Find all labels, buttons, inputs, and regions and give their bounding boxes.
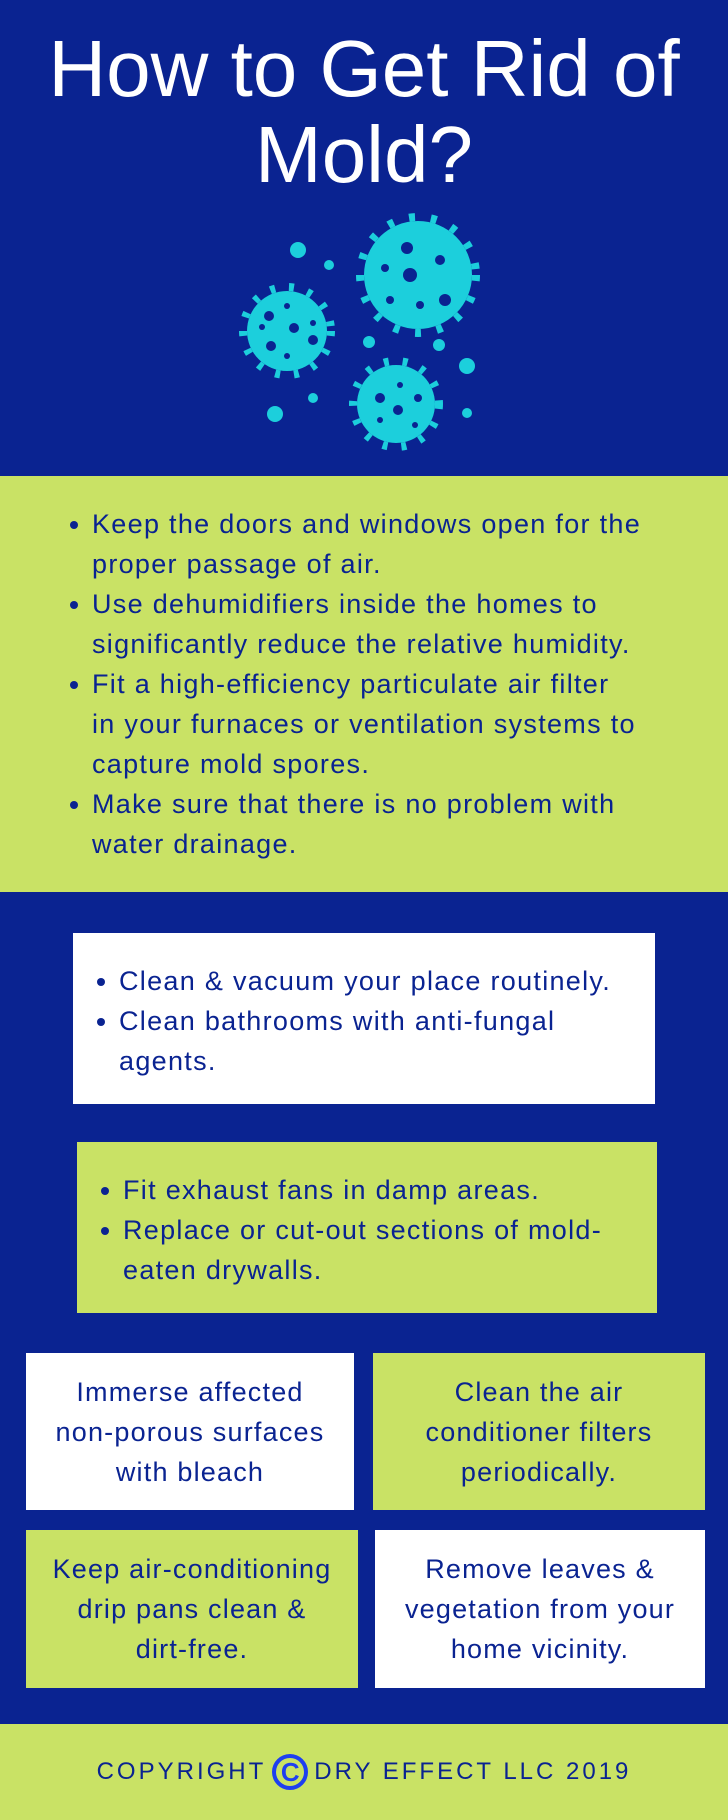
panel: cleaning tips: agents.	[119, 1046, 217, 1076]
panel: prevention tips: proper passage of air.	[92, 549, 382, 579]
card: AC filters: periodically.	[461, 1456, 617, 1486]
card: vegetation	[375, 1530, 705, 1688]
card: AC filters	[373, 1353, 705, 1510]
panel: prevention tips: Use dehumidifiers inside the homes to	[92, 589, 598, 619]
card: drip pans: Keep air-conditioning	[53, 1554, 331, 1584]
card: drip pans: dirt-free.	[136, 1634, 248, 1664]
panel: cleaning tips	[73, 933, 655, 1104]
title: Mold?	[255, 110, 473, 199]
card: vegetation: vegetation from your	[405, 1594, 675, 1624]
panel: prevention tips: significantly reduce the relative humidity.	[92, 629, 631, 659]
card: bleach	[26, 1353, 354, 1510]
panel: fans and drywall: Replace or cut-out sections of mold-	[123, 1215, 602, 1245]
panel: prevention tips: capture mold spores.	[92, 749, 370, 779]
card: drip pans	[26, 1530, 358, 1688]
footer: copyright	[0, 1724, 728, 1820]
footer: copyright: C	[281, 1757, 300, 1787]
card: AC filters: conditioner filters	[426, 1416, 652, 1446]
card: bleach: Immerse affected	[76, 1376, 304, 1406]
panel: prevention tips: water drainage.	[92, 829, 298, 859]
title: How to Get Rid of	[48, 24, 680, 113]
panel: fans and drywall: eaten drywalls.	[123, 1255, 323, 1285]
icon: mold spores	[239, 213, 480, 451]
title	[48, 24, 680, 199]
card: vegetation: Remove leaves &	[425, 1554, 655, 1584]
card: bleach: with bleach	[116, 1456, 264, 1486]
panel: prevention tips: in your furnaces or ventilation systems to	[92, 709, 636, 739]
card: bleach: non-porous surfaces	[56, 1416, 324, 1446]
footer: copyright: COPYRIGHT DRY EFFECT LLC 2019	[97, 1758, 631, 1785]
panel: cleaning tips: Clean & vacuum your place routinely.	[119, 966, 611, 996]
panel: fans and drywall: Fit exhaust fans in damp areas.	[123, 1175, 540, 1205]
card: AC filters: Clean the air	[455, 1376, 623, 1406]
panel: fans and drywall	[77, 1142, 657, 1313]
card: drip pans: drip pans clean &	[77, 1594, 307, 1624]
card: vegetation: home vicinity.	[451, 1634, 629, 1664]
panel: cleaning tips: Clean bathrooms with anti-fungal	[119, 1006, 555, 1036]
panel: prevention tips: Fit a high-efficiency particulate air filter	[92, 669, 609, 699]
panel: prevention tips: Make sure that there is no problem with	[92, 789, 615, 819]
panel: prevention tips	[0, 476, 728, 892]
panel: prevention tips: Keep the doors and windows open for the	[92, 509, 641, 539]
